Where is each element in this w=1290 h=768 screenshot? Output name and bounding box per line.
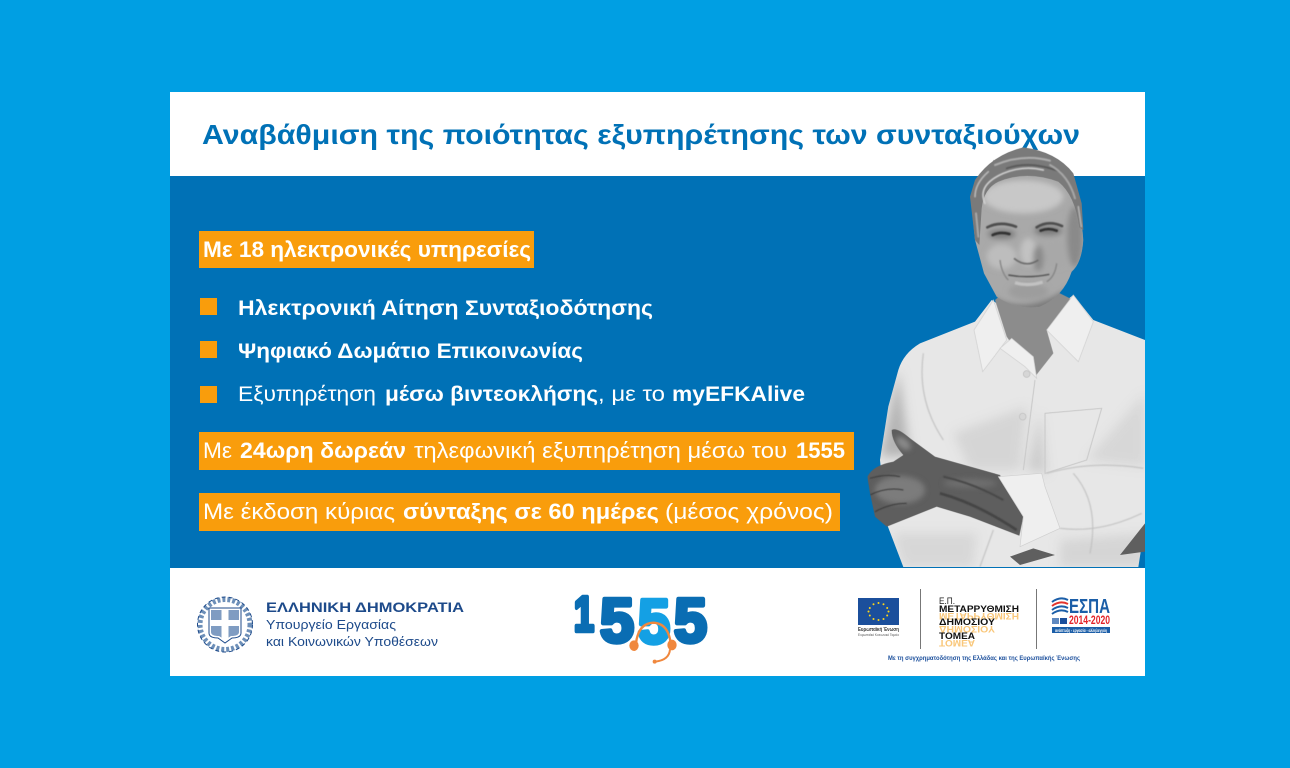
logo: ESPA 2014-2020: 2014-2020 [1069,615,1110,627]
logo: Hellenic Republic emblem [198,597,252,652]
heading: 18 e-services: Με 18 ηλεκτρονικές υπηρεσίες [203,237,531,262]
logo: ESPA 2014-2020 [1052,596,1110,634]
logo: OP Public Sector Reform: ΤΟΜΕΑ [939,637,975,648]
list item: video call: Εξυπηρέτηση [238,383,376,406]
EU stars [868,602,890,621]
logo: 1555: 5 [674,587,707,656]
logo: ESPA 2014-2020: ΕΣΠΑ [1069,596,1110,618]
logo: OP Public Sector Reform: ΔΗΜΟΣΙΟΥ [939,623,996,634]
co-funding note: Με τη συγχρηματοδότηση της Ελλάδας και της Ευρωπαϊκής Ένωσης [888,654,1081,662]
panel: header [170,92,1145,176]
logo: OP Public Sector Reform: Ε.Π. [939,596,955,606]
shirt [880,295,1145,567]
list item: digital room: Ψηφιακό Δωμάτιο Επικοινωνίας [238,340,583,363]
callout: 1555 phone line: τηλεφωνική εξυπηρέτηση μέσω του [414,438,787,463]
eyes and brows [987,223,1062,235]
rolled sleeve [998,473,1060,547]
logo: 1555: 5 [600,587,634,656]
divider left [920,589,921,649]
logo: ESPA 2014-2020: ανάπτυξη - εργασία - αλληλεγγύη [1055,628,1107,634]
callout: 60 days pension: σύνταξης σε 60 ημέρες [403,499,659,524]
logo: European Union [858,598,900,637]
list item: video call: μέσω βιντεοκλήσης [385,383,598,406]
logo: European Union: Ευρωπαϊκή Ένωση [858,627,900,633]
icon: headset [629,623,677,664]
list item: video call: , με το [598,383,665,406]
callout: 1555 phone line [199,432,854,470]
panel: footer [170,568,1145,676]
divider right [1036,589,1037,649]
logo: OP Public Sector Reform: ΤΟΜΕΑ [939,631,975,642]
list item: video call [200,383,805,406]
logo: OP Public Sector Reform: ΔΗΜΟΣΙΟΥ [939,617,996,628]
ministry name: ΕΛΛΗΝΙΚΗ ΔΗΜΟΚΡΑΤΙΑ [266,600,464,615]
mouth [1000,258,1057,285]
shirt shading [880,353,1145,567]
ministry name [266,600,464,649]
logo: European Union: Ευρωπαϊκό Κοινωνικό Ταμείο [858,633,899,637]
Greek flag stripes [1052,598,1068,614]
head [973,160,1084,307]
panel: services [170,176,1145,568]
hair highlights [975,158,1081,237]
logo: 1555 [574,587,707,657]
list item: pension application: Ηλεκτρονική Αίτηση Συνταξιοδότησης [238,297,653,320]
callout: 60 days pension: (μέσος χρόνος) [665,499,833,524]
hair [970,147,1083,245]
logo: 1555: 5 [638,588,670,657]
list item: video call: myEFKAlive [672,383,805,406]
callout: 1555 phone line: 1555 [796,438,845,463]
callout: 1555 phone line: 24ωρη δωρεάν [240,438,406,463]
logo: OP Public Sector Reform [939,596,1019,648]
logo: OP Public Sector Reform: ΜΕΤΑΡΡΥΘΜΙΣΗ [939,604,1019,615]
logo: OP Public Sector Reform: ΜΕΤΑΡΡΥΘΜΙΣΗ [939,610,1019,621]
ministry name: Υπουργείο Εργασίας [266,617,396,632]
neck [995,287,1073,377]
heading: 18 e-services [199,231,534,268]
shirt placket and pocket [1019,371,1102,473]
ministry name: και Κοινωνικών Υποθέσεων [266,634,438,649]
callout: 60 days pension [199,493,840,531]
face shading [983,180,1083,313]
callout: 60 days pension: Με έκδοση κύριας [203,499,395,524]
title: Αναβάθμιση της ποιότητας εξυπηρέτησης των συνταξιούχων [202,119,1080,150]
logo: 1555: 1 [574,588,594,642]
photo: man with crossed arms [860,147,1145,567]
callout: 1555 phone line: Με [203,438,232,463]
collar [974,295,1093,378]
forearm and hand [860,423,1033,540]
lower hand [1010,523,1145,565]
